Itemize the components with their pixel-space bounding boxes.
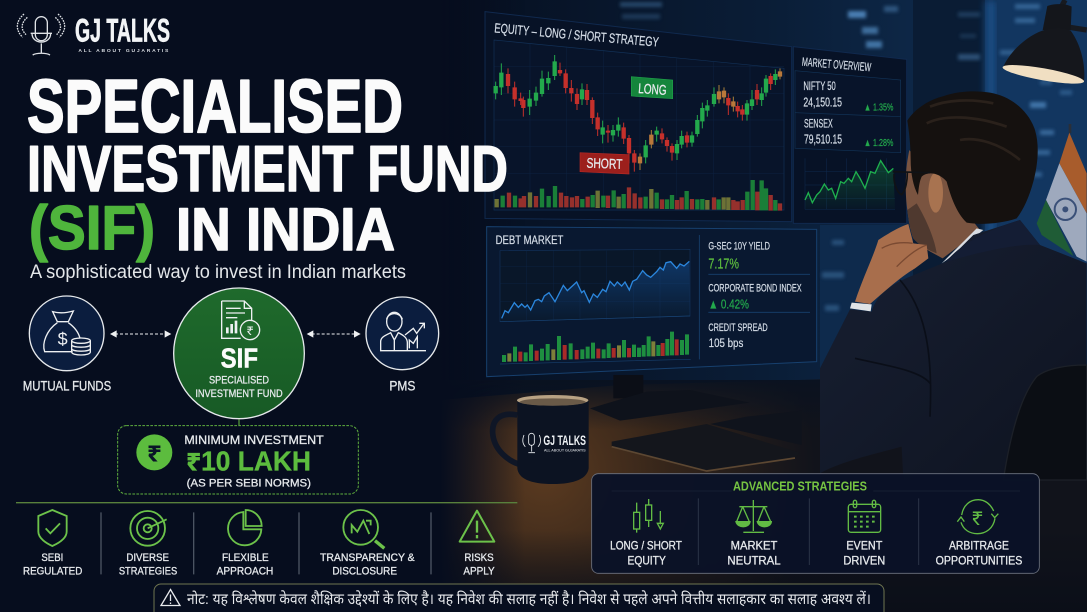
advanced strategies heading: ADVANCED STRATEGIES [733, 479, 867, 493]
minimum investment box: MINIMUM INVESTMENT [184, 433, 324, 447]
feature: risks apply: RISKS [464, 552, 494, 564]
g-sec yield stat [708, 240, 770, 272]
left panel fade [0, 0, 525, 612]
title [27, 64, 508, 263]
disclaimer note bar: नोट: यह विश्लेषण केवल शैक्षिक उद्देश्यों के लिए है। यह निवेश की सलाह नहीं है। निवेश से पहले अपने वित्तीय सलाहकार का सलाह अवश्य लें। [187, 590, 871, 608]
strategy: arbitrage opportunities [936, 500, 1023, 567]
mug logo: ALL ABOUT GUJARATIS [544, 449, 587, 453]
SIF circle: SIF [221, 342, 258, 373]
feature: risks apply: APPLY [463, 565, 495, 577]
feature: transparency and disclosure: DISCLOSURE [332, 565, 397, 577]
nifty 50 stats [803, 79, 893, 113]
arrow: mutual funds to SIF [110, 330, 171, 338]
strategy: event driven: DRIVEN [843, 554, 885, 567]
badge: short [580, 153, 629, 174]
panel: advanced strategies [592, 474, 1039, 573]
feature: SEBI regulated: SEBI [41, 552, 63, 564]
SIF circle: ₹ [246, 323, 254, 338]
jacket sleeve [820, 309, 872, 473]
feature: transparency and disclosure: TRANSPARENCY & [320, 552, 415, 564]
monitor: equity long short strategy [485, 12, 792, 222]
title: INVESTMENT FUND [27, 132, 508, 205]
mug logo: GJ TALKS [543, 432, 586, 448]
minimum investment box: (AS PER SEBI NORMS) [187, 478, 311, 490]
strategy: long short equity: EQUITY [627, 554, 666, 567]
feature: diverse strategies: STRATEGIES [119, 565, 177, 577]
SIF circle: SPECIALISED [209, 375, 269, 387]
SIF circle [174, 288, 304, 419]
green line chart [805, 161, 895, 209]
nifty 50 stats: 24,150.15 [803, 96, 842, 110]
feature: diverse strategies: DIVERSE [126, 552, 169, 564]
hand on chin [855, 224, 928, 304]
monitor stand [590, 375, 749, 421]
rupee coin icon [136, 434, 172, 470]
background: city skyline through window [440, 0, 1087, 400]
strategy: event driven [843, 500, 885, 567]
desk lamp [1002, 0, 1087, 87]
feature: SEBI regulated [23, 510, 82, 577]
brand logo: GJ Talks: GJ TALKS [75, 11, 170, 48]
office chair [1003, 365, 1087, 480]
microphone icon [17, 14, 65, 55]
strategy: long short equity [610, 499, 682, 567]
wooden desk [440, 372, 1087, 612]
mug logo [523, 432, 587, 453]
volume bars [497, 180, 780, 211]
mutual funds circle [23, 296, 111, 393]
title: (SIF) [29, 194, 155, 263]
feature: risks apply [460, 511, 495, 577]
shirt cuff [850, 303, 872, 311]
feature: diverse strategies [119, 511, 177, 577]
sensex stats [804, 116, 893, 149]
corporate bond index stat: CORPORATE BOND INDEX [708, 282, 802, 294]
icon: warning triangle [161, 590, 180, 606]
notebook and keyboard [612, 411, 802, 472]
strategy: arbitrage opportunities: ₹ [971, 505, 983, 530]
title: SPECIALISED [27, 64, 403, 148]
strategy: market neutral [727, 500, 781, 567]
jacket [820, 220, 1087, 480]
equity chart title: EQUITY – LONG / SHORT STRATEGY [494, 20, 659, 50]
comparison diagram [23, 288, 439, 494]
nifty 50 stats: NIFTY 50 [803, 79, 836, 93]
feature: flexible approach: FLEXIBLE [222, 552, 269, 564]
coffee mug [493, 395, 589, 484]
badge: long: LONG [638, 80, 667, 98]
glasses [893, 172, 930, 195]
ear [928, 173, 943, 213]
sensex stats: 79,510.15 [804, 133, 842, 147]
feature: flexible approach: APPROACH [217, 565, 273, 577]
brand logo: GJ Talks: ALL ABOUT GUJARATIS [78, 48, 169, 54]
minimum investment box: ₹10 LAKH [186, 446, 311, 477]
strategy: arbitrage opportunities: ARBITRAGE [949, 540, 1009, 553]
PMS circle [366, 297, 439, 393]
PMS label: PMS [389, 378, 415, 393]
person at desk seen from behind [820, 91, 1087, 480]
credit spread stat [708, 322, 768, 350]
badge: long [631, 77, 673, 99]
hair [907, 91, 1038, 224]
monitor: debt market [487, 227, 817, 484]
candlestick chart [496, 55, 780, 172]
strategy: market neutral: NEUTRAL [727, 554, 781, 567]
mutual funds label: MUTUAL FUNDS [23, 378, 111, 393]
feature: transparency and disclosure [320, 510, 415, 577]
strategy: event driven: EVENT [846, 540, 882, 553]
shirt collar [942, 228, 983, 263]
debt market heading: DEBT MARKET [496, 233, 564, 247]
brand logo: GJ Talks [17, 11, 170, 55]
features row [16, 503, 517, 577]
strategy: market neutral: MARKET [731, 540, 777, 553]
g-sec yield stat: G-SEC 10Y YIELD [708, 240, 770, 252]
badge: short: SHORT [586, 155, 623, 172]
disclaimer note bar [154, 584, 884, 612]
market overview heading: MARKET OVERVIEW [801, 55, 872, 74]
rupee coin icon: ₹ [147, 438, 162, 468]
corporate bond index stat: ▲ 0.42% [708, 296, 749, 311]
sensex stats: SENSEX [804, 116, 833, 130]
sensex stats: ▲ 1.28% [864, 138, 893, 149]
corporate bond index stat [708, 282, 802, 311]
subtitle: A sophisticated way to invest in Indian markets [30, 262, 406, 283]
strategy: long short equity: LONG / SHORT [610, 540, 682, 553]
arrow: SIF to PMS [307, 330, 361, 338]
SIF circle: INVESTMENT FUND [195, 388, 283, 400]
feature: SEBI regulated: REGULATED [23, 565, 82, 577]
minimum investment box [118, 419, 358, 494]
indian flag [1037, 124, 1087, 262]
g-sec yield stat: 7.17% [708, 256, 739, 272]
neck and face [906, 150, 980, 258]
nifty 50 stats: ▲ 1.35% [864, 102, 893, 113]
mutual funds circle: $ [58, 329, 68, 349]
credit spread stat: CREDIT SPREAD [708, 322, 768, 334]
strategy: arbitrage opportunities: OPPORTUNITIES [936, 554, 1023, 567]
title: IN INDIA [176, 196, 395, 263]
credit spread stat: 105 bps [709, 336, 743, 350]
debt volume bars [504, 332, 687, 362]
monitor: market overview [793, 47, 907, 223]
blue line chart [502, 261, 690, 321]
feature: flexible approach [217, 510, 273, 577]
